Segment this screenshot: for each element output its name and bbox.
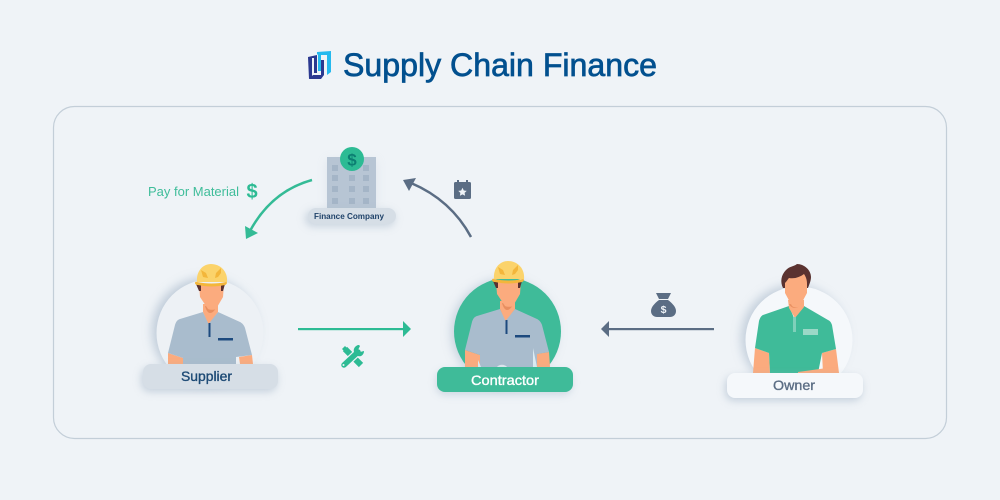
arrow: contractor to finance company: [403, 178, 471, 237]
worker figure: [168, 264, 253, 364]
icon: money bag: $: [661, 304, 667, 316]
pay for material label: Pay for Material: [148, 184, 239, 199]
avatar circle: [451, 279, 557, 385]
finance company label: Finance Company: [314, 212, 385, 221]
building: [327, 157, 376, 209]
finance company node: [305, 147, 396, 227]
contractor node: [436, 261, 573, 395]
owner figure: [753, 264, 839, 373]
main panel: [54, 106, 946, 438]
owner node: [725, 264, 863, 401]
arrow: supplier to contractor: [298, 321, 411, 337]
arrow: finance company to supplier: [245, 180, 312, 239]
arrow: owner to contractor: [601, 321, 714, 337]
pay for material label: [148, 181, 258, 203]
title with logo: [308, 47, 657, 83]
worker figure: [465, 261, 550, 367]
owner label: Owner: [773, 377, 815, 393]
icon: calendar with star: [454, 180, 471, 199]
supplier node: [141, 264, 278, 392]
icon: tools: [342, 345, 364, 366]
icon: money bag: [651, 293, 676, 317]
building shadow: [327, 160, 376, 210]
heading: Supply Chain Finance: [343, 47, 657, 83]
avatar circle: [741, 285, 847, 391]
logo: [308, 51, 331, 79]
contractor label: Contractor: [471, 372, 539, 388]
dollar badge: $: [347, 150, 357, 170]
icon: dollar: $: [246, 181, 258, 203]
avatar circle: [152, 278, 258, 384]
supplier label: Supplier: [181, 369, 233, 384]
